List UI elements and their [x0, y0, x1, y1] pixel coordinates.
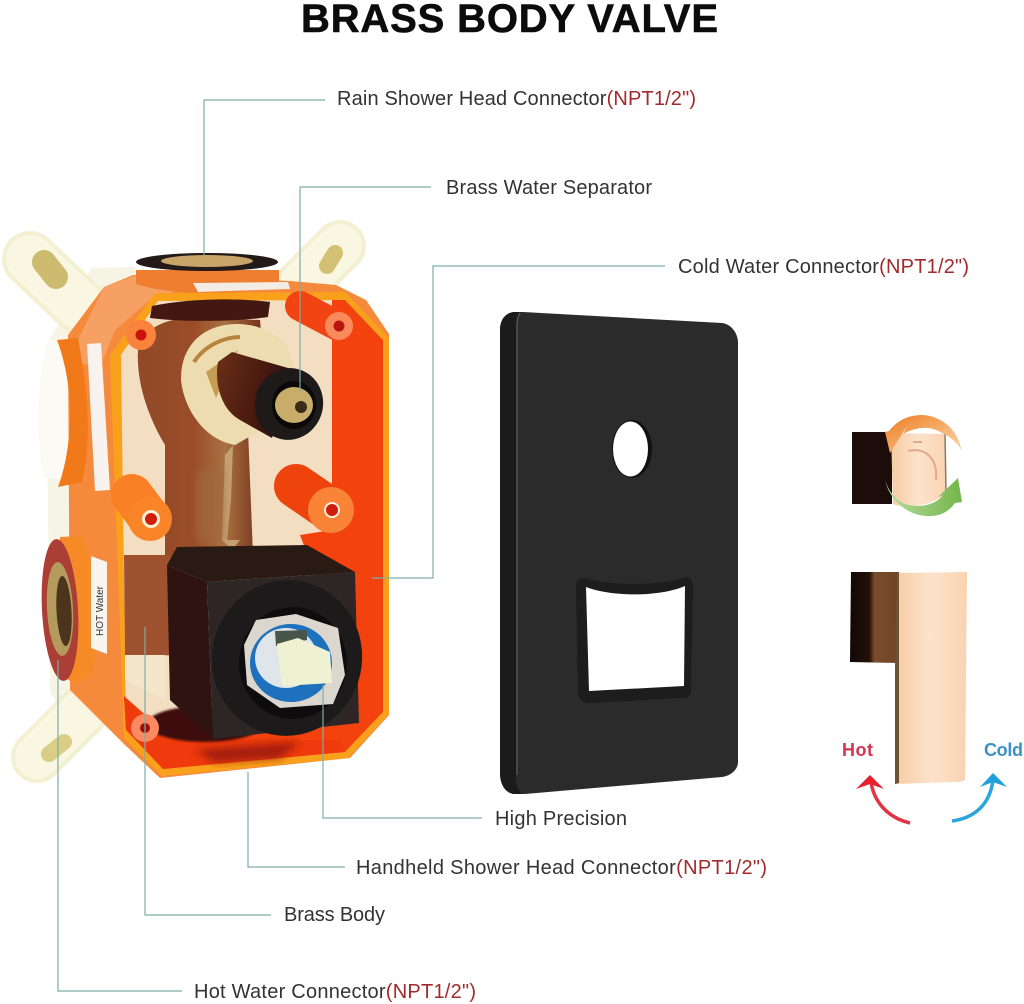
- label: rain shower head connector: Rain Shower Head Connector(NPT1/2"): [337, 88, 696, 110]
- label: brass water separator: Brass Water Separator: [446, 177, 652, 199]
- top inlet port: [136, 253, 279, 293]
- side sticker: [87, 343, 110, 491]
- leader lines: [58, 100, 665, 991]
- cover plate round hole: [612, 420, 652, 478]
- top sticker: [193, 282, 290, 292]
- icon: orange rotation arrow: [885, 415, 962, 453]
- cover plate window: [576, 577, 693, 703]
- icon: hot arrow: [856, 775, 910, 823]
- white side disc: [38, 340, 70, 480]
- cavity back wall: [121, 300, 383, 769]
- icon: mounting ear top right: [300, 246, 340, 286]
- label: brass body: Brass Body: [284, 904, 385, 926]
- cold label: Cold: [984, 740, 1023, 760]
- product photo: valve box: [30, 246, 389, 778]
- hot label: Hot: [842, 740, 873, 760]
- icon: mounting ear bottom left: [37, 712, 82, 757]
- icon: green rotation arrow: [885, 478, 962, 516]
- cover plate: [500, 312, 738, 794]
- hot water inlet: [38, 536, 97, 682]
- label: hot water connector: Hot Water Connector(NPT1/2"): [194, 981, 476, 1003]
- orange outer frame: [68, 275, 389, 778]
- small handle with rotation arrows: [852, 415, 962, 516]
- icon: cold arrow: [952, 773, 1007, 821]
- hot water sticker: HOT Water: [95, 585, 106, 636]
- red right wall: [124, 300, 383, 769]
- label: cold water connector: Cold Water Connector(NPT1/2"): [678, 256, 969, 278]
- mounting posts: [126, 306, 354, 742]
- cream back shell: [46, 267, 135, 735]
- gold handle: [850, 572, 967, 784]
- cartridge housing: [167, 545, 377, 750]
- hot water sticker: [91, 556, 107, 654]
- brass pipe: [124, 299, 270, 700]
- label: high precision: High Precision: [495, 808, 627, 830]
- icon: mounting ear top left: [30, 259, 82, 308]
- brass water separator: [181, 324, 331, 448]
- cavity rim: [110, 292, 389, 776]
- label: handheld shower head connector: Handheld Shower Head Connector(NPT1/2"): [356, 857, 767, 879]
- dark underside shadow: [147, 706, 263, 742]
